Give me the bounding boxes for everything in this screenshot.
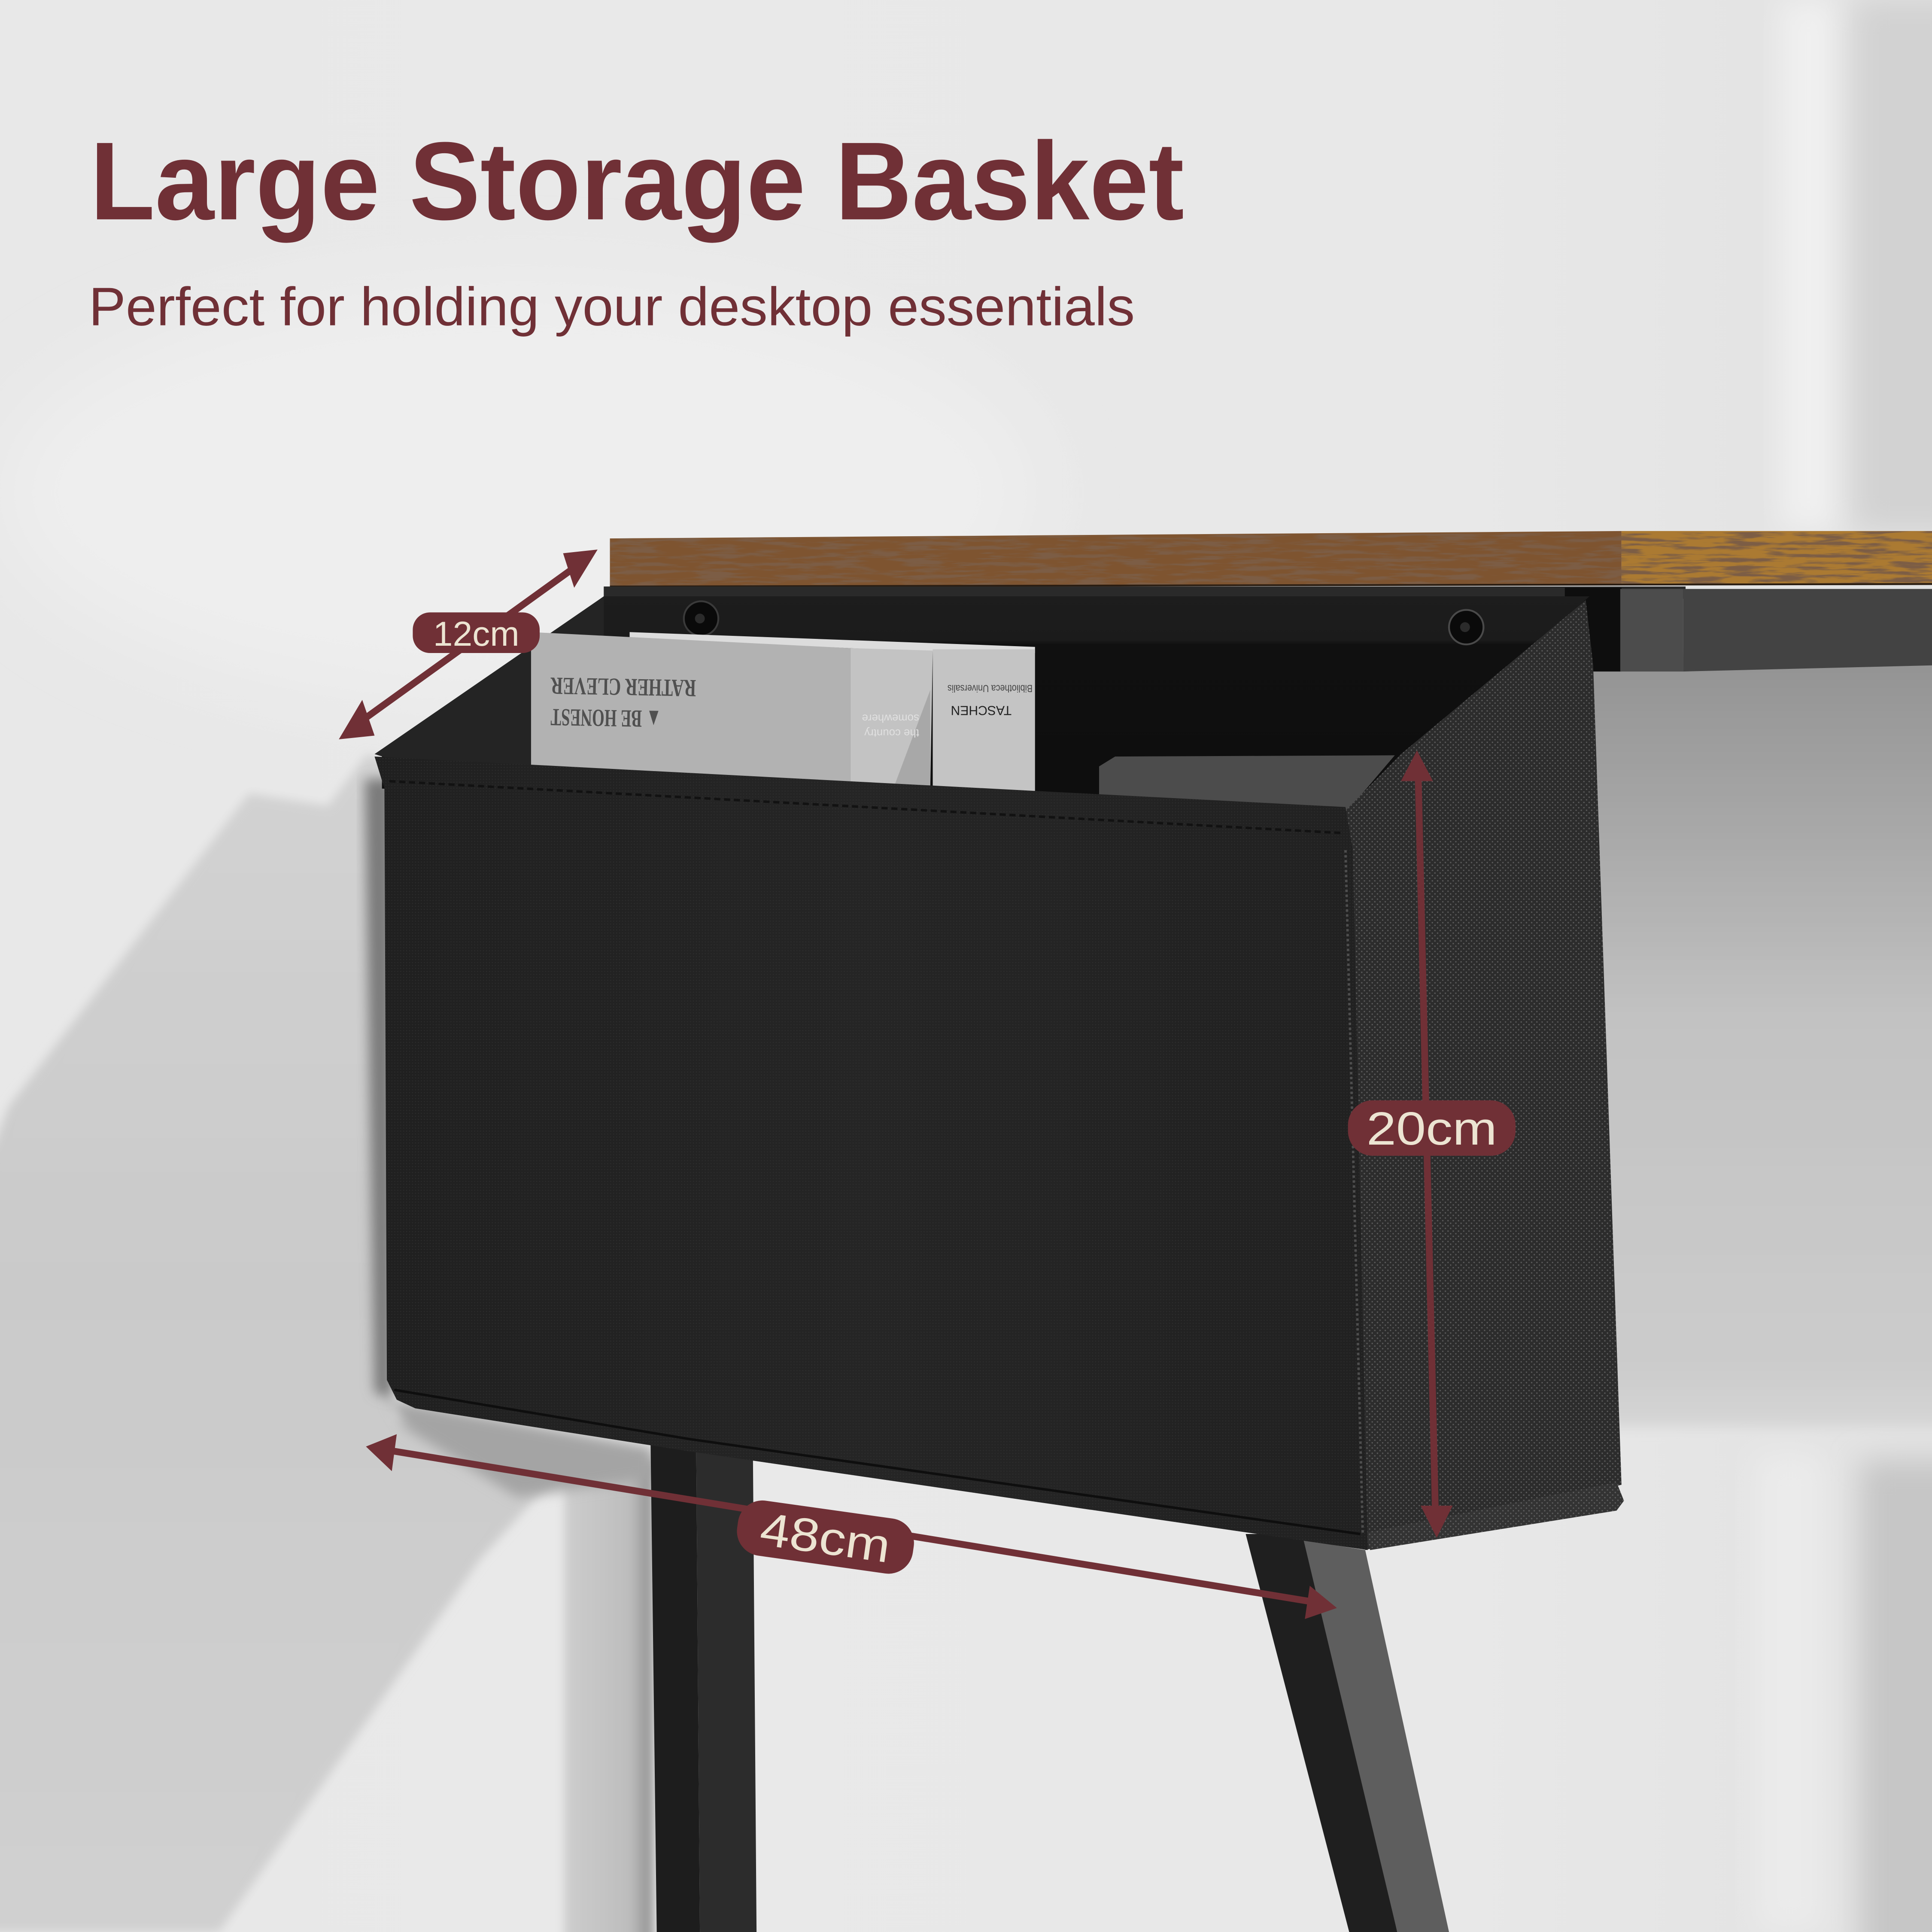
basket back wall (382, 596, 1589, 838)
book back: Bibliotheca Universalis (948, 683, 1033, 694)
books (531, 632, 1035, 802)
screw left (684, 601, 718, 636)
dimension: 12cm depth (339, 550, 598, 739)
title: Large Storage Basket (90, 119, 1184, 243)
arrow: 20cm (1401, 750, 1453, 1538)
desk table top (610, 531, 1932, 586)
storage basket (374, 596, 1624, 1550)
arrow: 12cm (339, 550, 598, 739)
desk metal frame (604, 586, 1932, 671)
desk leg right (1245, 1534, 1449, 1932)
book front: somewhere (862, 712, 919, 724)
book back: TASCHEN (951, 703, 1012, 717)
screw right (1449, 610, 1483, 644)
dimension: 20cm height (1348, 750, 1516, 1538)
book front (531, 632, 933, 789)
book back: Wolf (989, 788, 1014, 802)
label pill: 20cm: 20cm (1367, 1103, 1497, 1155)
book front: ▲ BE HONEST (550, 703, 662, 732)
wall shadow left of basket (0, 754, 653, 1932)
label pill: 20cm (1348, 1100, 1516, 1156)
basket side panel (1343, 600, 1624, 1550)
label pill: 12cm: 12cm (433, 615, 519, 653)
basket left inner side (374, 596, 604, 770)
frame bracket (1620, 589, 1683, 671)
label pill: 48cm (734, 1497, 917, 1577)
dimension: 48cm width (366, 1434, 1337, 1619)
label pill: 12cm (413, 612, 540, 653)
book front: RATHER CLEVER (550, 672, 696, 702)
leather pad (1099, 755, 1395, 813)
book front: the country (864, 727, 919, 739)
subtitle: Perfect for holding your desktop essentials (89, 276, 1135, 337)
wall shadow below desk (1577, 653, 1932, 1427)
desk leg left (650, 1442, 756, 1932)
arrow: 48cm (366, 1434, 1337, 1619)
book back (933, 649, 1035, 802)
label pill: 48cm: 48cm (757, 1503, 894, 1573)
basket front panel (374, 756, 1368, 1550)
